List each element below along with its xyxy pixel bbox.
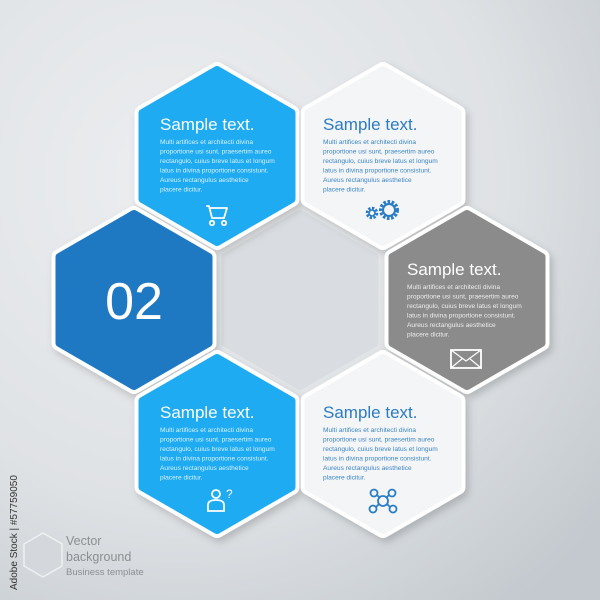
icon: person question: [208, 487, 233, 511]
text block: Aureus rectangulus aesthetice: [323, 177, 412, 184]
panel: top-right white: [308, 70, 458, 242]
text block: Multi artifices et architecti divina: [407, 284, 500, 291]
panel: top-left blue: [142, 70, 292, 242]
text block: proportione usi sunt, praesertim aureo: [160, 148, 272, 156]
text block: Aureus rectangulus aesthetice: [160, 177, 249, 184]
text block: [160, 139, 275, 194]
text block: [323, 427, 438, 482]
panel: bottom-right white: [308, 358, 458, 530]
text block: placere dicitur.: [160, 186, 203, 194]
text block: rectangulo, cuius breve latus et longum: [407, 303, 522, 310]
panel: bottom-left blue: [142, 358, 292, 530]
text block: rectangulo, cuius breve latus et longum: [323, 158, 438, 165]
panel: right grey: [392, 214, 542, 386]
icon: cart: [206, 206, 227, 225]
text block: Multi artifices et architecti divina: [160, 427, 253, 434]
icon: gears: [368, 202, 397, 218]
footer: vector background label: Business template: [66, 567, 144, 578]
text block: proportione usi sunt, praesertim aureo: [323, 436, 435, 444]
footer: vector background label: Vector: [66, 534, 101, 548]
text block: latus in divina proportione consistunt.: [323, 168, 432, 174]
text block: placere dicitur.: [323, 186, 366, 194]
heading: Sample text.: [160, 115, 254, 134]
heading: Sample text.: [160, 403, 254, 422]
panel: left 02: [60, 214, 208, 386]
icon: network: [370, 490, 396, 512]
icon: small hexagon: [24, 533, 62, 577]
text block: placere dicitur.: [323, 474, 366, 482]
icon: person question: ?: [226, 487, 233, 501]
number 02: 02: [105, 273, 163, 331]
text block: placere dicitur.: [160, 474, 203, 482]
footer: vector background label: [24, 533, 144, 578]
text block: proportione usi sunt, praesertim aureo: [160, 436, 272, 444]
heading: Sample text.: [323, 403, 418, 422]
text block: Aureus rectangulus aesthetice: [407, 322, 496, 329]
text block: latus in divina proportione consistunt.: [160, 168, 269, 174]
text block: [160, 427, 275, 482]
icon: envelope: [451, 350, 481, 368]
vertical watermark id: Adobe Stock | #57759050: [9, 475, 20, 590]
text block: proportione usi sunt, praesertim aureo: [323, 148, 435, 156]
text block: latus in divina proportione consistunt.: [160, 456, 269, 462]
center hex (empty): [226, 214, 374, 386]
text block: Multi artifices et architecti divina: [323, 139, 416, 146]
text block: latus in divina proportione consistunt.: [323, 456, 432, 462]
text block: Aureus rectangulus aesthetice: [323, 465, 412, 472]
footer: vector background label: background: [66, 550, 131, 564]
text block: rectangulo, cuius breve latus et longum: [160, 446, 275, 453]
text block: [407, 284, 522, 338]
text block: proportione usi sunt, praesertim aureo: [407, 294, 519, 300]
text block: Multi artifices et architecti divina: [160, 139, 253, 146]
text block: latus in divina proportione consistunt.: [407, 312, 516, 320]
text block: [323, 139, 438, 194]
text block: Aureus rectangulus aesthetice: [160, 465, 249, 472]
text block: placere dicitur.: [407, 332, 450, 338]
heading: Sample text.: [323, 115, 418, 134]
heading: Sample text.: [407, 260, 502, 279]
text block: rectangulo, cuius breve latus et longum: [323, 446, 438, 453]
text block: rectangulo, cuius breve latus et longum: [160, 158, 275, 165]
text block: Multi artifices et architecti divina: [323, 427, 416, 434]
